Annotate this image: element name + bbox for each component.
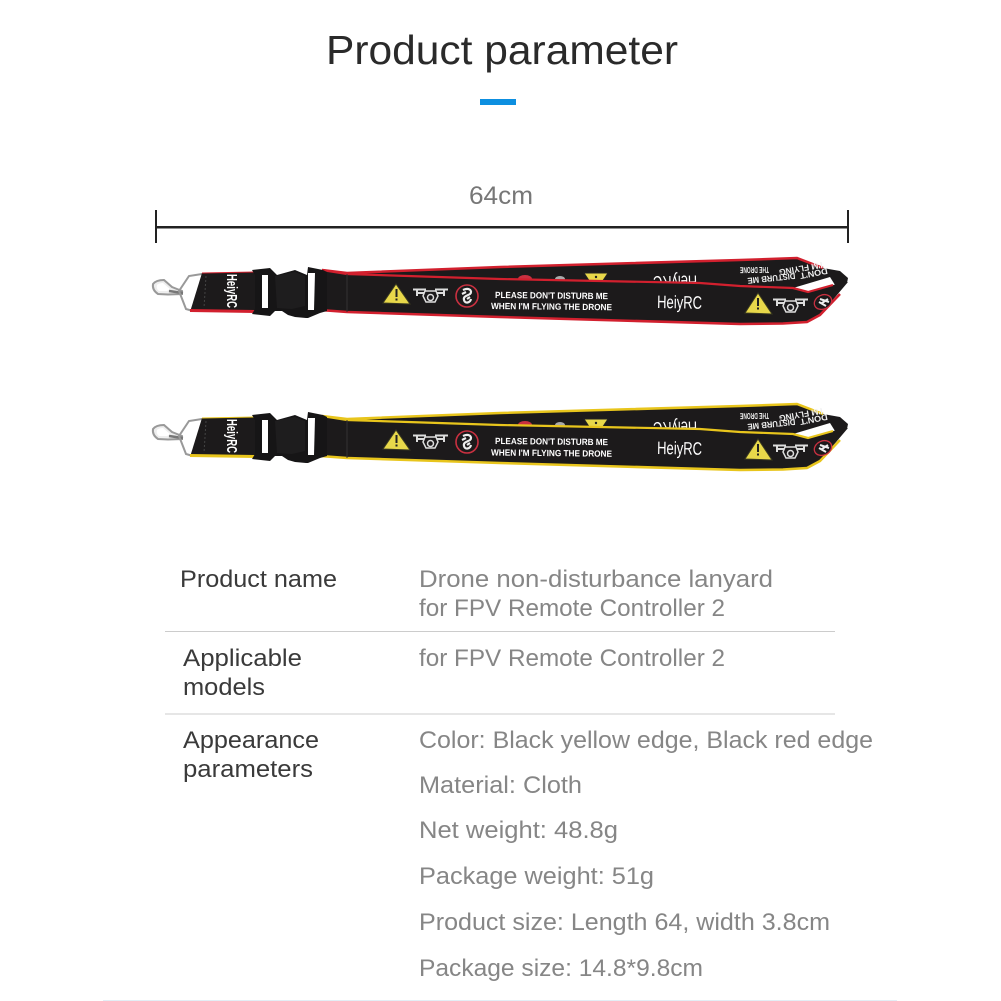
back band: I'M FLYING	[778, 406, 823, 424]
back band: HeiyRC	[653, 272, 697, 292]
table row: appearance parameters: parameters	[183, 756, 313, 783]
title: Product parameter	[326, 27, 678, 73]
carabiner clip	[153, 419, 202, 456]
short strap end	[190, 417, 256, 457]
no-disturb badge	[456, 431, 478, 453]
back band: DON'T	[798, 412, 829, 427]
table row: appearance parameters: Product size: Length 64, width 3.8cm	[419, 909, 830, 936]
back band: THE DRONE	[740, 265, 769, 275]
table row: applicable models: models	[183, 674, 265, 701]
back band: DISTURB ME	[747, 417, 796, 432]
band logo: HeiyRC	[657, 438, 702, 459]
back band: THE DRONE	[740, 411, 769, 421]
title accent bar	[480, 99, 516, 105]
short strap end: HeiyRC	[223, 274, 240, 308]
short strap end: HeiyRC	[223, 419, 240, 453]
table row: appearance parameters: Material: Cloth	[419, 772, 582, 799]
back band	[322, 258, 848, 292]
band slogan	[491, 290, 612, 312]
back band	[322, 404, 848, 438]
buckle	[252, 412, 327, 463]
front band	[320, 415, 848, 470]
band slogan: WHEN I'M FLYING THE DRONE	[491, 301, 612, 312]
table row: applicable models: Applicable	[183, 645, 302, 672]
warning triangle	[383, 284, 410, 304]
no-disturb badge	[812, 438, 834, 458]
table row: applicable models	[183, 645, 725, 701]
back band: HeiyRC	[653, 418, 697, 438]
back band: DISTURB ME	[747, 271, 796, 286]
table row: appearance parameters: Package weight: 51g	[419, 863, 654, 890]
warning triangle	[745, 439, 772, 460]
table row: product name: Drone non-disturbance lanyard	[419, 566, 773, 593]
table row: appearance parameters: Net weight: 48.8g	[419, 817, 618, 844]
buckle	[252, 267, 327, 318]
lanyard: black with yellow edge	[153, 404, 848, 470]
warning triangle	[383, 430, 410, 450]
table row: appearance parameters: Package size: 14.8*9.8cm	[419, 955, 703, 982]
dimension: 64cm length: 64cm	[469, 182, 533, 210]
table row: product name: for FPV Remote Controller 2	[419, 595, 725, 622]
band slogan: PLEASE DON'T DISTURB ME	[495, 436, 608, 447]
table row: product name: Product name	[180, 566, 337, 593]
back band: DON'T	[798, 266, 829, 281]
table row: appearance parameters: Appearance	[183, 727, 319, 754]
band slogan: WHEN I'M FLYING THE DRONE	[491, 448, 612, 459]
table row: product name	[180, 566, 773, 622]
drone icon	[773, 446, 808, 458]
band logo: HeiyRC	[657, 292, 702, 313]
drone icon	[413, 436, 448, 448]
band slogan	[491, 436, 612, 459]
band slogan: PLEASE DON'T DISTURB ME	[495, 290, 608, 301]
table row: appearance parameters	[183, 727, 873, 982]
short strap end	[190, 272, 256, 312]
drone icon	[413, 290, 448, 302]
no-disturb badge	[456, 285, 478, 307]
warning triangle	[745, 293, 772, 314]
carabiner clip	[153, 274, 202, 311]
drone icon	[773, 300, 808, 312]
no-disturb badge	[812, 292, 834, 312]
table row: appearance parameters: Color: Black yellow edge, Black red edge	[419, 727, 873, 754]
table row: applicable models: for FPV Remote Controller 2	[419, 645, 725, 672]
back band: I'M FLYING	[778, 260, 823, 278]
lanyard: black with red edge	[153, 258, 848, 324]
front band	[320, 270, 848, 324]
